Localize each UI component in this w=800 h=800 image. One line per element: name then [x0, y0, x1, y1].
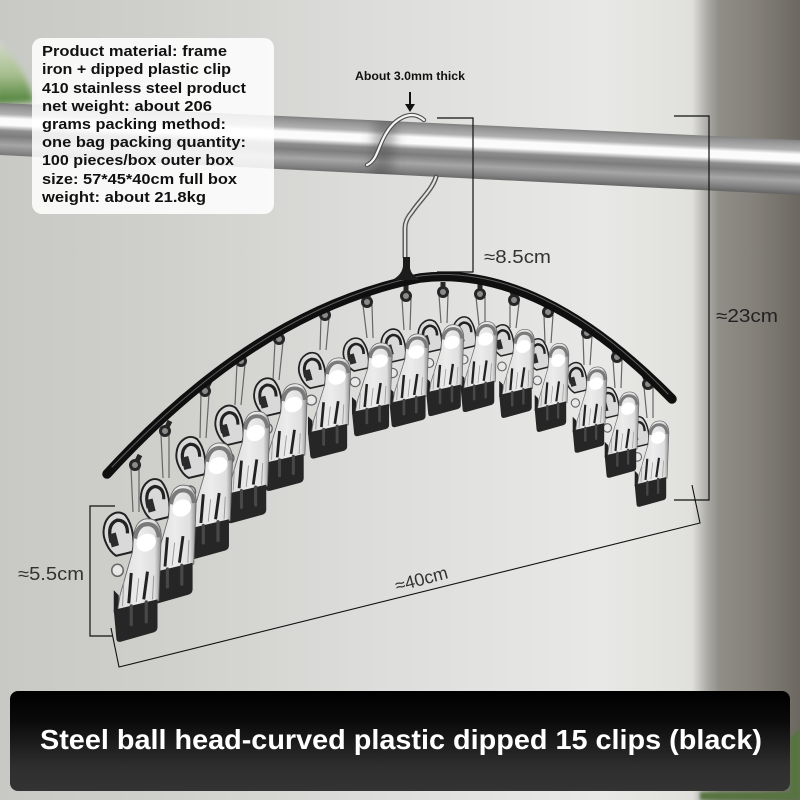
thickness arrow: [405, 92, 415, 112]
dimension: hook height bracket: [437, 118, 473, 272]
black curved hanger arc: [107, 275, 672, 474]
product specification panel: iron + dipped plastic clip: [42, 61, 231, 78]
product specification panel: size: 57*45*40cm full box: [42, 171, 238, 188]
product specification panel: Product material: frame: [42, 43, 227, 60]
dimension label: 5.5cm: ≈5.5cm: [18, 564, 84, 584]
dimension: total height bracket: [674, 116, 709, 500]
dimension: width line: [111, 485, 700, 667]
product specification panel: one bag packing quantity:: [42, 134, 246, 151]
title bar: Steel ball head-curved plastic dipped 15 clips (black): [40, 724, 762, 755]
product specification panel: weight: about 21.8kg: [41, 189, 206, 206]
hook lower section: [405, 177, 436, 257]
product specification panel: net weight: about 206: [42, 98, 212, 115]
plant at upper left: [0, 38, 34, 104]
clips: 15 steel pegs with black tips: [104, 317, 669, 642]
product specification panel: 100 pieces/box outer box: [42, 152, 235, 169]
dimension label: 40cm: ≈40cm: [393, 563, 450, 596]
hook collar: [392, 257, 420, 280]
hanger rings on arc: [130, 282, 652, 470]
wire links from arc to clips: [131, 295, 653, 512]
product specification panel: grams packing method:: [42, 116, 226, 133]
title bar: [10, 691, 790, 791]
plant at bottom right: [700, 728, 800, 800]
product specification panel: [32, 38, 274, 214]
dimension: clip height bracket: [90, 506, 115, 636]
dimension label: 8.5cm: ≈8.5cm: [484, 247, 551, 267]
product specification panel: 410 stainless steel product: [42, 80, 246, 97]
chrome pole: [0, 103, 800, 195]
hook upper section over the pole: [367, 115, 424, 165]
dimension label: 23cm: ≈23cm: [716, 306, 778, 326]
thickness label: About 3.0mm thick: [355, 71, 466, 83]
